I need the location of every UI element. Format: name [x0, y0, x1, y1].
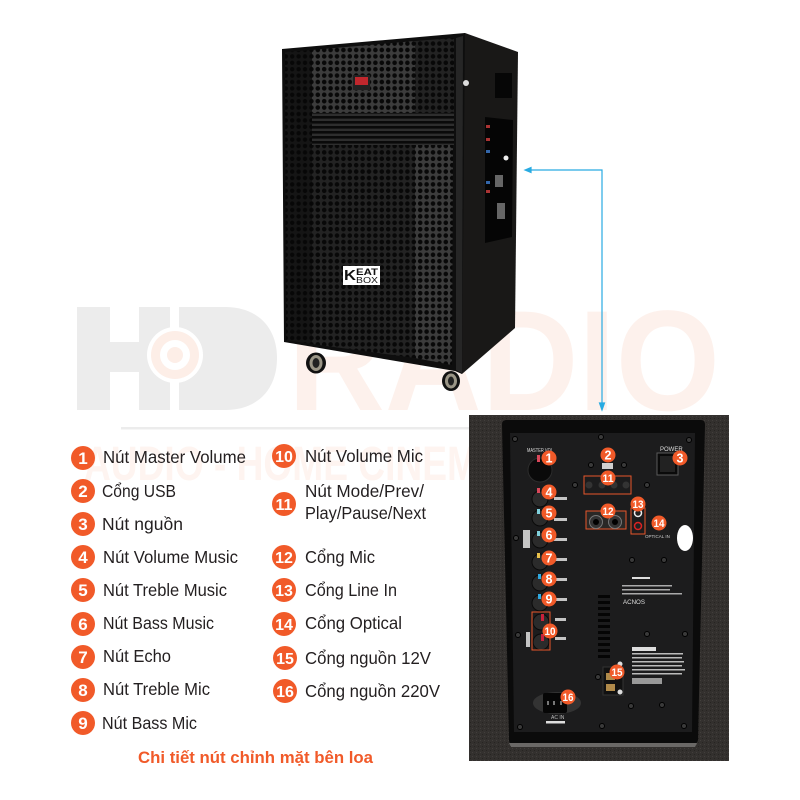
item 4: 4	[78, 548, 88, 567]
item 15: Cổng nguồn 12V	[305, 648, 431, 668]
item 1: Nút Master Volume	[103, 447, 246, 467]
badge 7: 7	[546, 552, 553, 566]
master volume knob: MASTER VOL	[527, 448, 553, 454]
orange box: mode buttons	[584, 476, 631, 494]
connector arrow	[525, 168, 604, 410]
item 15	[273, 646, 431, 670]
item 10	[272, 444, 423, 468]
master volume knob	[527, 448, 553, 482]
power switch	[657, 447, 683, 475]
badge 8: 8	[546, 572, 553, 586]
badge 15: 15	[612, 667, 622, 679]
recess	[502, 420, 705, 745]
item 13: Cổng Line In	[305, 580, 397, 600]
recess lower lip	[509, 743, 697, 747]
item 4	[71, 545, 238, 569]
item 14: 14	[275, 617, 293, 634]
item 11: Play/Pause/Next	[305, 503, 426, 523]
item 7: Nút Echo	[103, 646, 171, 666]
item 8	[71, 678, 210, 702]
power switch: POWER	[660, 447, 683, 453]
badge 11	[600, 470, 616, 486]
item 5	[71, 578, 227, 602]
badge 6: 6	[546, 528, 553, 542]
mic jacks	[586, 511, 626, 529]
item 11	[272, 481, 426, 523]
item 10: 10	[275, 449, 293, 466]
item 8: 8	[78, 681, 88, 700]
item 8: Nút Treble Mic	[103, 679, 210, 699]
orange box: mic knobs	[532, 612, 550, 650]
knob pointers	[537, 488, 544, 641]
item 2	[71, 479, 176, 503]
item 2: 2	[78, 482, 88, 501]
item 12: Cổng Mic	[305, 547, 375, 567]
caster wheels	[306, 352, 460, 391]
spec text: ACNOS	[623, 599, 646, 606]
bright front edge	[456, 36, 463, 373]
badge 4: 4	[546, 486, 553, 500]
item 1: 1	[78, 449, 88, 468]
AC inlet	[533, 692, 581, 724]
item 14	[272, 612, 402, 636]
item 2: Cổng USB	[102, 481, 176, 501]
badge 2: 2	[605, 448, 612, 462]
spec text	[622, 577, 682, 606]
badge 6	[542, 528, 556, 542]
small knobs	[532, 491, 549, 650]
item 1	[71, 446, 246, 470]
item 13	[272, 578, 397, 602]
badge 1	[542, 450, 556, 466]
KBeat logo: K	[344, 267, 356, 284]
caption: Chi tiết nút chỉnh mặt bên loa	[138, 748, 374, 767]
badge 3: 3	[677, 452, 684, 466]
item 6: Nút Bass Music	[103, 613, 214, 633]
badge 11: 11	[602, 473, 614, 485]
badge 5	[542, 506, 556, 520]
badge 5: 5	[546, 506, 553, 520]
badge 10: 10	[544, 626, 556, 638]
KBeat logo	[343, 266, 380, 285]
legend column 2	[272, 444, 440, 703]
item 11: Nút Mode/Prev/	[305, 481, 424, 501]
item 9: 9	[78, 714, 88, 733]
item 6: 6	[78, 615, 88, 634]
badge 14	[652, 516, 666, 530]
item 16: 16	[276, 684, 294, 701]
badge 4	[542, 484, 556, 500]
item 6	[71, 612, 214, 636]
item 12: 12	[275, 550, 293, 567]
speaker product photo	[282, 33, 518, 391]
watermark: HD RADIO logo: RADIO	[288, 282, 720, 441]
brand badge	[353, 75, 370, 90]
item 7: 7	[78, 648, 88, 667]
badge 2	[600, 448, 616, 462]
AC inlet: AC IN	[551, 715, 565, 721]
speaker side panel	[455, 33, 518, 374]
item 10: Nút Volume Mic	[305, 446, 423, 466]
item 16: Cổng nguồn 220V	[305, 681, 440, 701]
12V socket	[603, 662, 623, 695]
item 13: 13	[275, 583, 293, 600]
badge 9	[542, 592, 556, 606]
badge 15	[610, 664, 624, 680]
divider line	[121, 427, 471, 430]
item 14: Cổng Optical	[305, 613, 402, 633]
item 12	[272, 545, 375, 569]
photo background	[469, 415, 729, 761]
badge 16	[560, 690, 576, 704]
item 9	[71, 711, 197, 735]
side control plate	[485, 117, 513, 243]
warning text	[632, 647, 685, 684]
control plate	[510, 433, 695, 732]
item 4: Nút Volume Music	[103, 547, 238, 567]
front face	[282, 33, 465, 374]
item 5: 5	[78, 581, 88, 600]
legend column 1	[71, 446, 246, 735]
badge 1: 1	[546, 452, 553, 466]
item 15: 15	[276, 651, 294, 668]
badge 10	[542, 624, 558, 638]
badge 3	[672, 450, 688, 466]
item 9: Nút Bass Mic	[102, 713, 197, 733]
item 16	[273, 679, 440, 703]
item 3	[71, 512, 183, 536]
front perforated grille	[285, 38, 454, 365]
item 7	[71, 645, 171, 669]
badge 12: 12	[602, 506, 614, 518]
badge 14: 14	[654, 518, 665, 530]
badge 7	[542, 550, 556, 566]
item 3: Nút nguồn	[102, 514, 183, 534]
USB port	[602, 463, 613, 469]
KBeat logo: BOX	[356, 276, 379, 285]
item 3: 3	[78, 515, 88, 534]
screws	[512, 434, 692, 730]
side hole	[463, 80, 469, 86]
item 5: Nút Treble Music	[103, 580, 227, 600]
badge 16: 16	[562, 692, 574, 704]
line-in jacks	[631, 508, 645, 534]
badge 9: 9	[546, 592, 553, 606]
KBeat logo: EAT	[356, 267, 379, 277]
badge 13	[630, 496, 646, 512]
vent slots	[598, 595, 610, 658]
side handle	[495, 73, 512, 98]
panel: side control photo	[469, 415, 729, 761]
watermark: HD RADIO logo	[77, 282, 720, 441]
optical label: OPTICAL IN	[645, 534, 670, 539]
item 11: 11	[276, 497, 293, 514]
white knob labels	[523, 497, 567, 647]
badge 8	[542, 572, 556, 586]
badge 12	[600, 504, 616, 518]
white sticker	[677, 525, 693, 551]
badge 13: 13	[632, 499, 644, 511]
